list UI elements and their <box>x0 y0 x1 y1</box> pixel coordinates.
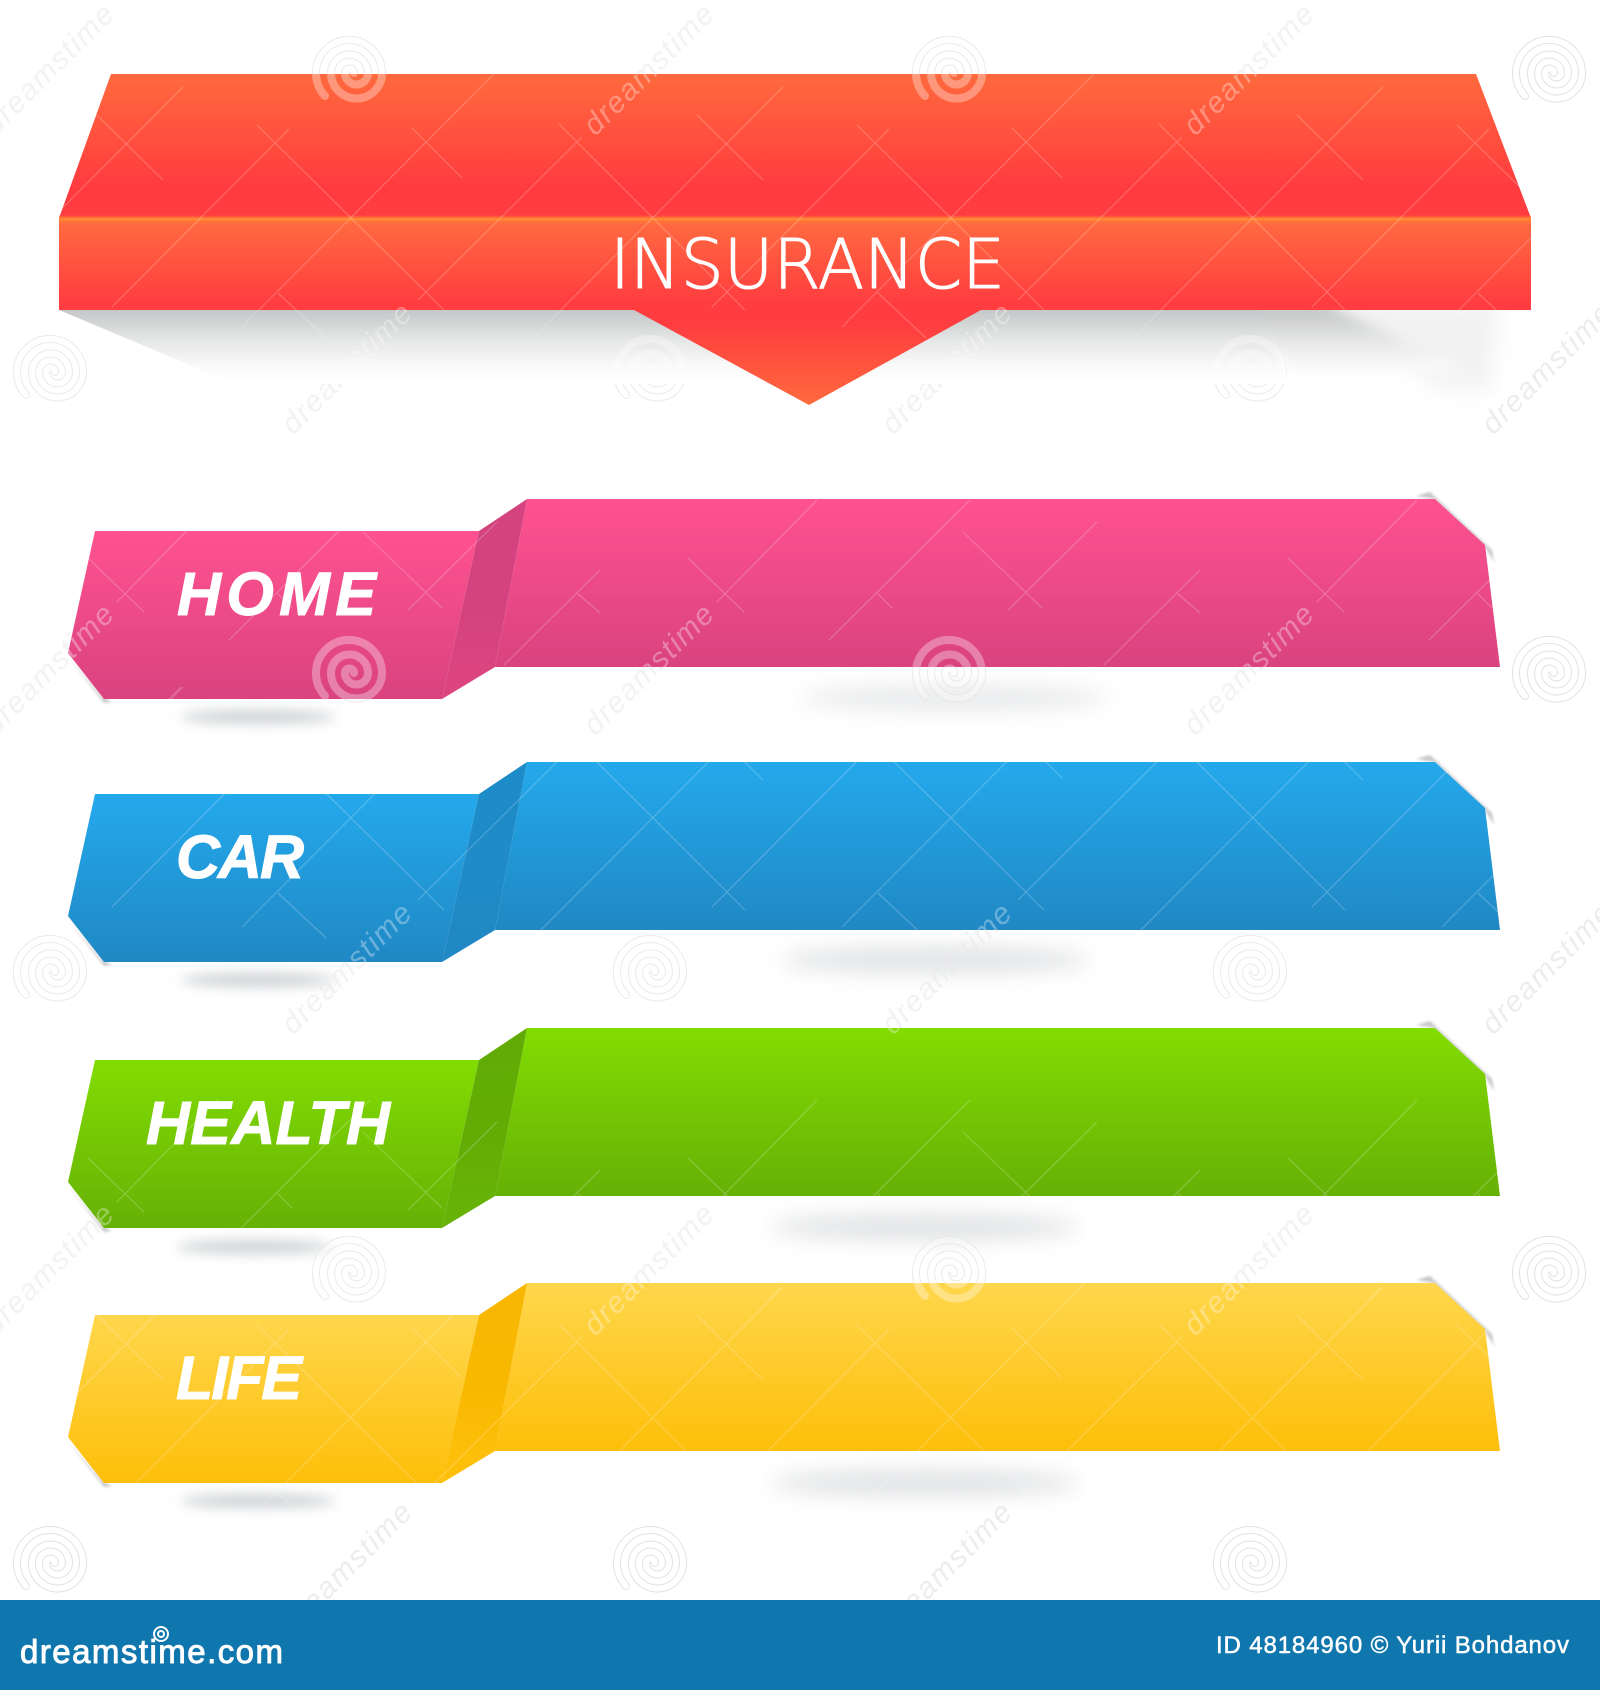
footer image id and credit: ID 48184960 © Yurii Bohdanov <box>1216 1632 1569 1659</box>
health right section <box>495 1028 1500 1196</box>
title: INSURANCE: INSURANCE <box>610 225 1005 305</box>
watermark overlay on coloured bands: dreamstime <box>275 896 420 1041</box>
life band shadows <box>180 1471 1080 1508</box>
watermark spirals and text on white: dreamstime <box>1177 0 1322 142</box>
panel: home band <box>68 492 1500 724</box>
health corner shadows <box>68 1021 1494 1232</box>
watermark overlay on coloured bands: dreamstime <box>275 296 420 441</box>
panel: health band <box>68 1021 1500 1254</box>
watermark spirals and text on white: dreamstime <box>275 296 420 441</box>
car band shadows <box>180 948 1090 987</box>
watermark spirals and text on white: dreamstime <box>577 597 722 742</box>
panel: insurance header ribbon <box>59 74 1531 405</box>
watermark overlay on coloured bands <box>0 0 1322 1342</box>
car fold <box>442 762 527 962</box>
label: HEALTH: HEALTH <box>146 1089 392 1157</box>
car left tab <box>68 794 479 962</box>
watermark overlay on coloured bands: dreamstime <box>875 896 1020 1041</box>
header fold highlight <box>59 215 1531 224</box>
label: CAR: CAR <box>176 823 304 891</box>
watermark overlay on coloured bands: dreamstime <box>1177 597 1322 742</box>
life corner shadows <box>68 1276 1494 1487</box>
watermark spirals and text on white: dreamstime <box>875 896 1020 1041</box>
health fold <box>442 1028 527 1228</box>
watermark spirals and text on white: dreamstime <box>1177 1197 1322 1342</box>
shadow under header ribbon <box>59 300 1500 392</box>
health band shadows <box>176 1215 1080 1254</box>
watermark spirals and text on white: dreamstime <box>875 296 1020 441</box>
car right section <box>495 762 1500 930</box>
watermark overlay on coloured bands: dreamstime <box>577 1197 722 1342</box>
watermark spirals and text on white: dreamstime <box>577 0 722 142</box>
footer bar <box>0 1600 1600 1690</box>
life fold <box>442 1283 527 1483</box>
watermark overlay on coloured bands: dreamstime <box>1177 0 1322 142</box>
label: LIFE: LIFE <box>176 1344 304 1412</box>
life left tab <box>68 1315 479 1483</box>
watermark overlay on coloured bands: dreamstime <box>577 597 722 742</box>
life right section <box>495 1283 1500 1451</box>
home left tab <box>68 531 479 699</box>
car corner shadows <box>68 755 1494 966</box>
watermark spirals and text on white: dreamstime <box>875 1495 1020 1640</box>
panel: car band <box>68 755 1500 987</box>
watermark overlay on coloured bands: dreamstime <box>577 0 722 142</box>
watermark overlay on coloured bands: dreamstime <box>875 296 1020 441</box>
health left tab <box>68 1060 479 1228</box>
header front face with pointer <box>59 222 1531 405</box>
home right section <box>495 499 1500 667</box>
watermark spirals and text on white: dreamstime <box>577 1197 722 1342</box>
header top face <box>59 74 1531 222</box>
panel: life band <box>68 1276 1500 1508</box>
footer logo spiral <box>154 1627 168 1641</box>
watermark overlay on coloured bands: dreamstime <box>1177 1197 1322 1342</box>
label: HOME: HOME <box>177 560 378 628</box>
home fold <box>442 499 527 699</box>
home corner shadows <box>68 492 1494 703</box>
footer logo text: dreamstime.com <box>20 1633 283 1670</box>
watermark spirals and text on white: dreamstime <box>275 1495 420 1640</box>
watermark line lattice <box>62 74 1531 1483</box>
home band shadows <box>180 687 1110 724</box>
watermark spirals and text on white: dreamstime <box>1177 597 1322 742</box>
watermark spirals and text on white: dreamstime <box>275 896 420 1041</box>
